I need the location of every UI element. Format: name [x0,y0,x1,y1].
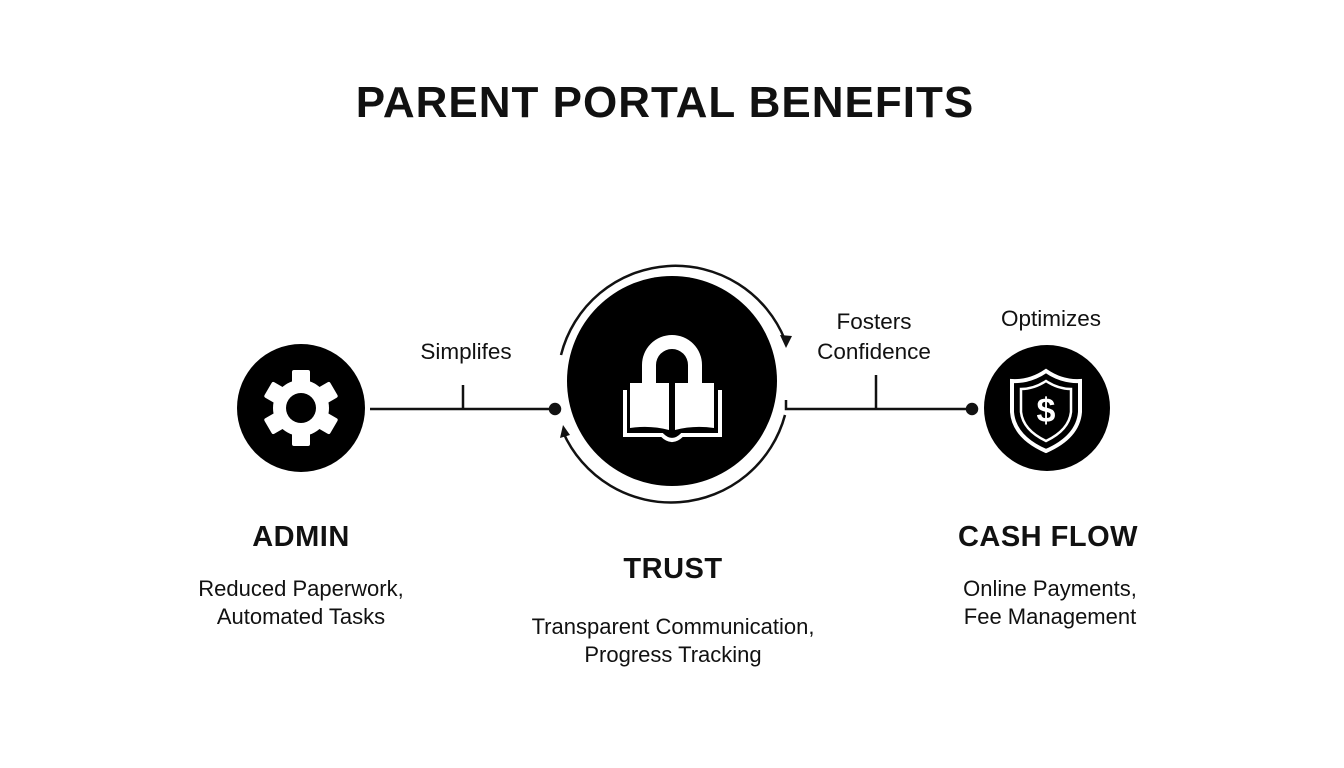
text: admin description: Automated Tasks [217,604,385,629]
label: Fosters Confidence: Fosters [836,309,912,334]
title: PARENT PORTAL BENEFITS [356,78,974,127]
icon: shield dollar: $ [1037,392,1056,430]
text: admin description: Reduced Paperwork, [198,576,404,601]
heading: TRUST: TRUST [623,553,723,585]
text: trust description: Transparent Communication, [532,614,814,639]
connector: admin to trust [370,385,560,414]
icon: gear in circle [237,344,365,472]
label: Fosters Confidence: Confidence [817,339,931,364]
connector: trust to cash flow [786,375,977,414]
heading: ADMIN: ADMIN [252,521,350,553]
text: cash flow description: Online Payments, [963,576,1137,601]
icon: trust lock-book with cycle arrows [560,266,792,502]
text: cash flow description [963,576,1137,629]
text: cash flow description: Fee Management [964,604,1136,629]
text: trust description [532,614,814,667]
label: Fosters Confidence [817,309,931,364]
text: admin description [198,576,404,629]
label: Simplifes: Simplifes [420,339,512,364]
text: trust description: Progress Tracking [584,642,762,667]
icon: shield dollar [984,345,1110,471]
label: Optimizes: Optimizes [1001,306,1101,331]
heading: CASH FLOW: CASH FLOW [958,521,1138,553]
